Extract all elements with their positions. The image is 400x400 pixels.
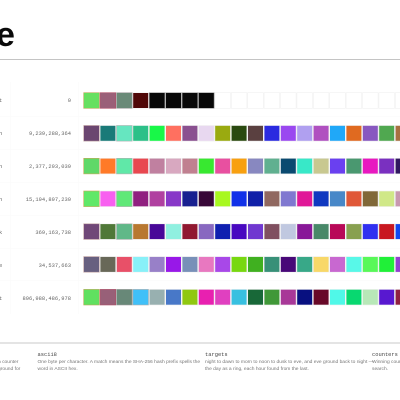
row: noon: 15,194,897,230 — [26, 197, 71, 203]
row: dusk: 369,163,738 — [35, 230, 71, 236]
footer note: ascii8 — [38, 352, 200, 372]
footer note: ascii8: One byte per character. A match means the SHA-256 hash prefix spells the — [38, 359, 200, 365]
footer note: ascii8: word in ASCII hex. — [38, 366, 78, 372]
footer note: counter column — [0, 359, 21, 372]
footer note: targets: night to dawn to morn to noon to dusk to eve, and eve ground back to night — — [205, 359, 374, 365]
row: night: 896,988,486,978 — [22, 296, 71, 302]
footer note: targets — [205, 352, 374, 372]
footer note: targets: the day as a ring, each hour found from the last. — [205, 366, 309, 372]
row: morn: 2,377,293,039 — [29, 164, 71, 170]
footer note: targets: targets — [205, 352, 228, 358]
row: night zero — [0, 93, 400, 108]
footer note: counters: search. — [372, 366, 388, 372]
row: eve — [0, 257, 400, 272]
footer note: counters — [372, 352, 400, 372]
row: noon — [0, 191, 400, 207]
row: dawn — [0, 126, 400, 141]
row: morn — [0, 158, 400, 174]
footer note: counters: counters — [372, 352, 398, 358]
row: night — [0, 289, 400, 305]
row: night zero: 0 — [68, 98, 71, 104]
row: dusk — [0, 224, 400, 239]
footer note: ascii8: ascii8 — [38, 352, 57, 358]
row: dawn: 9,239,288,364 — [29, 131, 71, 137]
row: eve: 34,537,663 — [39, 263, 71, 269]
